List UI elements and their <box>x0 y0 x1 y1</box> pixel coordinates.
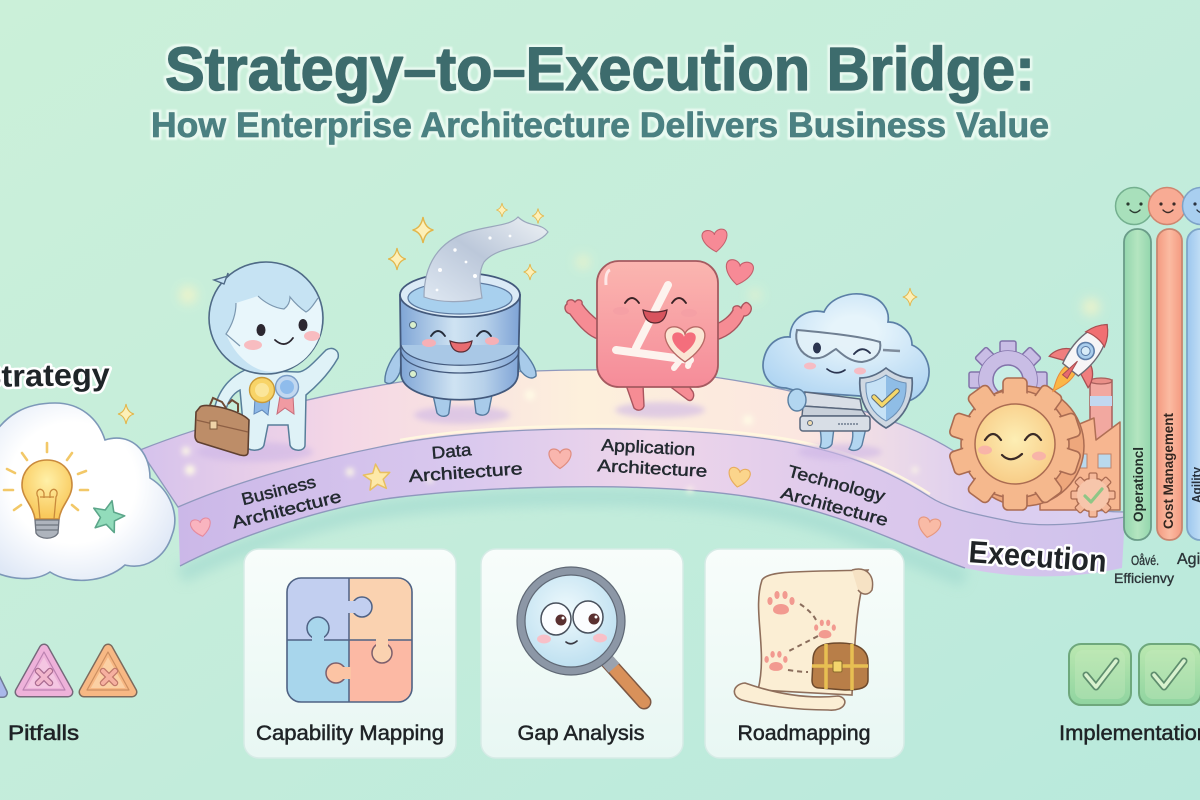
icon: pink triangle <box>20 649 68 692</box>
app logo <box>616 285 690 360</box>
bridge shadow <box>180 497 965 578</box>
icon: heart on bridge 3 <box>727 467 751 489</box>
character shadows <box>197 402 882 462</box>
sparkle <box>903 288 917 306</box>
icon: purple triangle <box>0 650 3 693</box>
eyes and smile <box>256 319 308 336</box>
icon: treasure map scroll <box>734 569 873 710</box>
smiley: blue <box>1182 188 1200 224</box>
icon: star on bridge <box>362 463 391 491</box>
character: application architecture <box>565 229 754 410</box>
icon: check box 1 <box>1069 644 1131 705</box>
execution group: gears, factory, rocket <box>949 309 1126 579</box>
bar caption: operational efficiency <box>1114 552 1174 586</box>
treasure chest <box>812 643 868 690</box>
label: Business Architecture: Business <box>239 472 318 509</box>
label: Capability Mapping <box>256 722 444 745</box>
hair outline fringe <box>226 296 318 346</box>
character: data architecture <box>385 203 548 416</box>
character: business architecture <box>195 262 338 456</box>
sparkle glows on bridge <box>182 390 918 493</box>
smiley: green <box>1116 188 1152 224</box>
data stream <box>424 217 548 302</box>
label: Roadmapping <box>738 722 870 745</box>
bridge walking surface <box>140 370 1125 525</box>
card: capability mapping <box>244 549 456 758</box>
label: Pitfalls: Pitfalls <box>8 722 79 745</box>
eyes and smile <box>813 342 821 354</box>
label: Application Architecture <box>597 436 708 481</box>
label: Application Architecture: Application <box>601 436 696 459</box>
card shape <box>481 549 683 758</box>
icon: magnifying glass <box>517 567 644 702</box>
floating hearts <box>701 229 754 287</box>
label: Data Architecture <box>408 440 523 486</box>
face <box>226 296 322 372</box>
blush <box>244 331 320 350</box>
small check gear <box>1071 473 1115 517</box>
title line 1: Strategy–to–Execution Bridge: <box>165 35 1035 103</box>
label: Execution: Execution <box>968 534 1108 579</box>
label: Business Architecture <box>230 472 343 532</box>
bar: cost management <box>1157 229 1182 540</box>
label: Technology Architecture: Architecture <box>779 483 890 530</box>
legs <box>433 395 492 416</box>
arm <box>788 389 806 411</box>
top ellipse <box>400 273 520 317</box>
briefcase <box>195 398 249 456</box>
walking surface highlight <box>400 426 930 494</box>
bridge front face <box>178 429 1125 576</box>
bridge front outline <box>180 487 965 568</box>
label: Data Architecture: Architecture <box>408 459 523 486</box>
label: Business Architecture: Architecture <box>230 487 343 532</box>
goggles <box>796 330 900 362</box>
rocket <box>1034 309 1126 407</box>
body and arms <box>214 348 338 450</box>
hair tuft <box>214 273 228 284</box>
bar caption: agility: Agi <box>1177 551 1200 568</box>
label: Data Architecture: Data <box>431 440 473 463</box>
card shape <box>244 549 456 758</box>
legs <box>820 428 866 450</box>
icon: check box 2 <box>1139 644 1200 705</box>
icon: heart on bridge 4 <box>916 516 941 539</box>
icon: orange triangle <box>84 649 132 692</box>
heart badge <box>665 327 705 362</box>
label: Technology Architecture: Technology <box>786 462 888 506</box>
icon: puzzle <box>287 578 412 702</box>
face <box>431 331 491 336</box>
ambient glows <box>180 256 1099 315</box>
arms <box>385 345 536 384</box>
label: Application Architecture: Architecture <box>597 456 708 481</box>
bar: operational <box>1124 229 1151 540</box>
medals <box>250 376 298 415</box>
strategy cloud <box>0 357 175 580</box>
pitfalls <box>0 649 132 745</box>
bar: cost management: Cost Management <box>1160 413 1176 529</box>
dashed route <box>787 604 818 672</box>
icon: heart on bridge 1 <box>190 517 212 538</box>
card: gap analysis <box>481 549 683 758</box>
bridge <box>140 370 1125 578</box>
label: Implementation: Implementation <box>1059 722 1200 745</box>
square body <box>597 261 718 387</box>
legs <box>626 385 694 410</box>
sparkles <box>388 203 544 280</box>
factory chimney <box>1090 378 1112 440</box>
icon: sparkle <box>118 404 134 424</box>
title line 2: How Enterprise Architecture Delivers Business Value <box>151 106 1049 145</box>
server <box>800 392 870 431</box>
gear depth offset <box>964 386 1084 506</box>
value bars <box>1114 188 1200 586</box>
band <box>401 345 519 365</box>
paw prints <box>764 591 836 671</box>
factory windows <box>1074 454 1111 468</box>
character: technology architecture <box>763 288 929 450</box>
purple gear <box>969 341 1047 413</box>
smiley: salmon <box>1148 188 1186 224</box>
bar: agility <box>1187 229 1200 540</box>
label: Gap Analysis <box>518 722 644 745</box>
stream sparkle dots <box>436 235 511 291</box>
icon: light bulb <box>4 443 88 538</box>
highlight <box>606 270 610 285</box>
cloud shape <box>0 403 175 580</box>
head <box>209 262 323 374</box>
card shape <box>705 549 904 758</box>
face <box>625 298 686 303</box>
label: Technology Architecture <box>779 462 890 530</box>
bar: operational: Operationcl <box>1130 447 1146 522</box>
card: roadmapping <box>705 549 904 758</box>
cloud body <box>763 294 929 402</box>
factory building <box>1040 418 1120 510</box>
icon: green star <box>89 497 128 534</box>
icon: heart on bridge 2 <box>549 449 571 468</box>
implementation <box>1059 644 1200 745</box>
bar caption: operational efficiency: Oåvé. <box>1131 552 1159 568</box>
big gear <box>949 378 1081 510</box>
cylinder body <box>400 295 520 400</box>
bar caption: operational efficiency: Efficienvy <box>1114 570 1174 586</box>
arms <box>565 300 751 340</box>
title <box>151 35 1049 145</box>
shield <box>860 368 912 428</box>
